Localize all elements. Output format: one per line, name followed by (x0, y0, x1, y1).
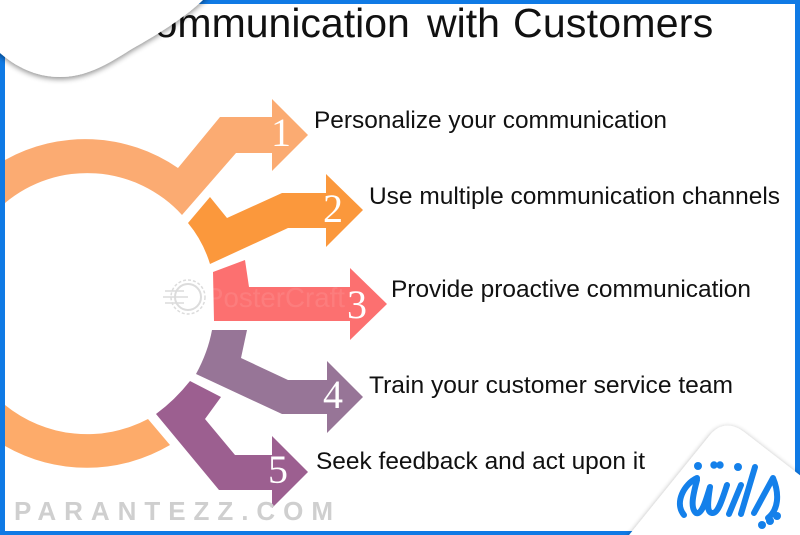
site watermark text: PARANTEZZ.COM (14, 496, 333, 526)
arrow 4: muted purple arrow (196, 330, 363, 433)
numeral 2: 2 (323, 186, 343, 231)
title: with (426, 0, 500, 46)
numeral 3: 3 (347, 282, 367, 327)
corner shape: top-left white wave (0, 0, 213, 77)
label 4: Train your customer service team (369, 372, 733, 399)
corner shape: bottom-right white tab (621, 426, 800, 535)
label 2: Use multiple communication channels (369, 183, 780, 210)
arrow 2: orange arrow (188, 174, 363, 264)
numeral 1: 1 (271, 110, 291, 155)
title: Customers (513, 0, 713, 46)
logo dots (694, 462, 702, 470)
watermark: faint wordmark over arrow 3: PosterCraft (205, 282, 345, 313)
arrow 1: light orange ring arc and arrow (5, 99, 308, 215)
logo: blue script mark (680, 461, 781, 529)
arrow 3: coral arrow (213, 260, 387, 340)
title: Communication (125, 0, 410, 46)
label 3: Provide proactive communication (391, 276, 751, 303)
label 5: Seek feedback and act upon it (316, 448, 645, 475)
arrow 5: purple arrow (156, 381, 308, 508)
numeral 4: 4 (323, 372, 343, 417)
label 1: Personalize your communication (314, 107, 667, 134)
numeral 5: 5 (268, 447, 288, 492)
ring arc: lower orange segment (5, 405, 170, 468)
watermark: faint gear logo (163, 280, 205, 314)
